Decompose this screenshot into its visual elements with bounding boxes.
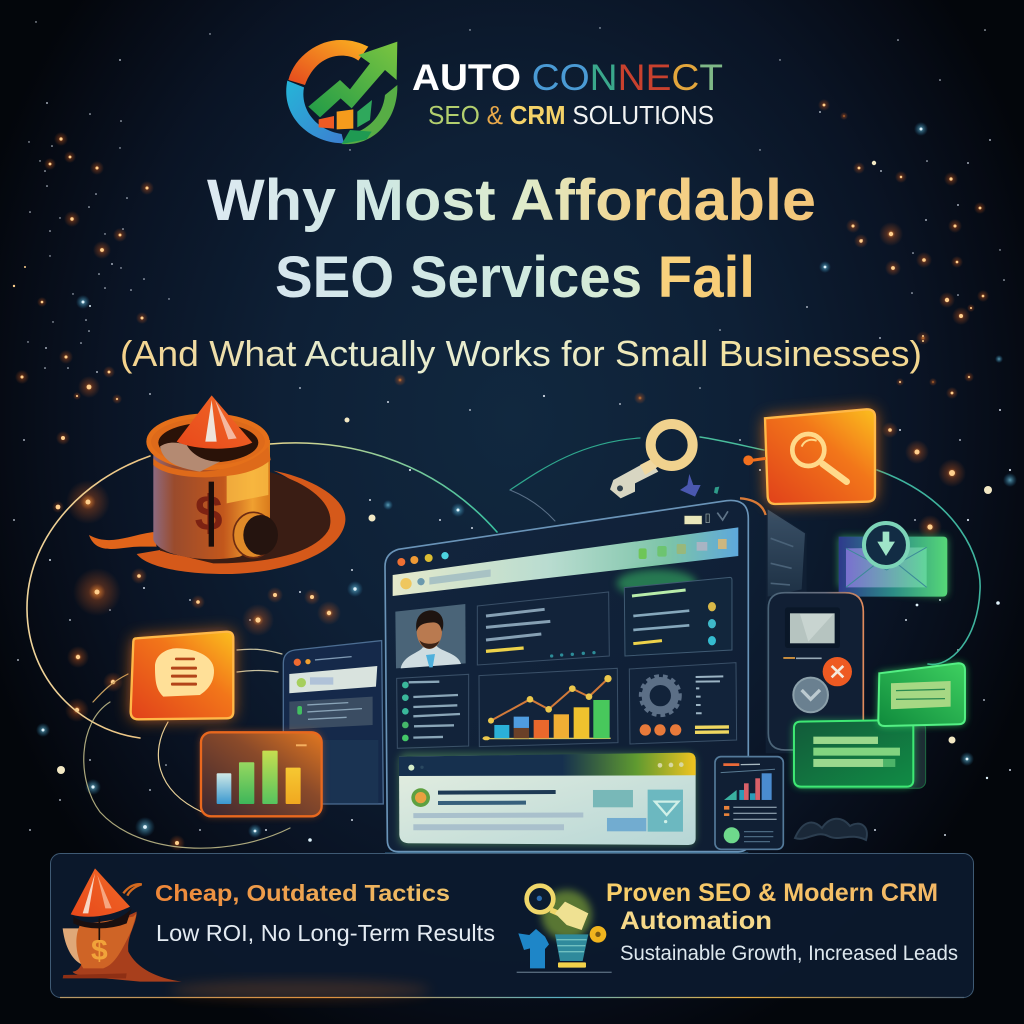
main dashboard window: [385, 500, 748, 853]
icon card: bar chart: [201, 732, 322, 816]
heading: proven SEO and modern CRM automation: Automation: [620, 907, 772, 935]
icon: key: [610, 424, 693, 498]
server panel behind dashboard: [740, 498, 807, 753]
logo tagline: SEO & CRM SOLUTIONS: [428, 100, 714, 130]
window controls: [684, 511, 728, 525]
icon: proven SEO: [517, 886, 612, 972]
dollar sign: $: [195, 486, 223, 542]
icon: orange cone: [177, 395, 252, 449]
icon card: speech bubble: [131, 632, 233, 719]
heading: proven SEO and modern CRM automation: [606, 879, 938, 935]
address bar: [393, 527, 738, 596]
wave scribble under devices: [795, 819, 867, 840]
icon: cheap tactics: $: [91, 934, 108, 967]
icon: small arrow: [680, 474, 701, 497]
title: SEO Services Fail: [275, 245, 755, 310]
icon card: green message small: [878, 663, 965, 726]
icon: leaking money bucket with cone: [89, 395, 345, 574]
window dots: [397, 552, 449, 566]
title: Why Most Affordable: [207, 168, 816, 233]
icon: logo ring with growth arrow: [286, 40, 397, 144]
list card: [397, 674, 469, 748]
logo: [286, 40, 723, 144]
icon card: email: [839, 523, 947, 597]
title: [207, 168, 816, 310]
profile card: [395, 604, 466, 668]
toolbar icons: [639, 539, 727, 559]
orbit lines: [27, 437, 980, 848]
status card: [624, 577, 732, 656]
mini tablet: [715, 757, 783, 849]
small background panel left: [283, 641, 383, 804]
text: sustainable growth: Sustainable Growth, Increased Leads: [620, 942, 958, 965]
icon card: green message large: [794, 720, 926, 788]
icon: gear: [641, 676, 680, 715]
line and bar chart: [479, 668, 618, 747]
icon: cheap tactics: [63, 868, 182, 982]
heading: proven SEO and modern CRM automation: Proven SEO & Modern CRM: [606, 879, 938, 907]
lower content panel: [399, 753, 696, 845]
icon card: magnifier: [743, 409, 875, 504]
green glow: [617, 569, 697, 597]
heading: cheap outdated tactics: Cheap, Outdated Tactics: [155, 880, 450, 906]
icon: phone device: [768, 593, 863, 750]
right side icons: [610, 409, 965, 788]
gear card: [629, 663, 737, 744]
text card: [477, 592, 609, 665]
logo wordmark: AUTO CONNECT: [412, 57, 723, 98]
text: low ROI: Low ROI, No Long-Term Results: [156, 920, 495, 946]
icon: coin: [233, 512, 273, 558]
subtitle: (And What Actually Works for Small Businesses): [120, 333, 922, 374]
panel: bottom comparison: [50, 854, 974, 1000]
